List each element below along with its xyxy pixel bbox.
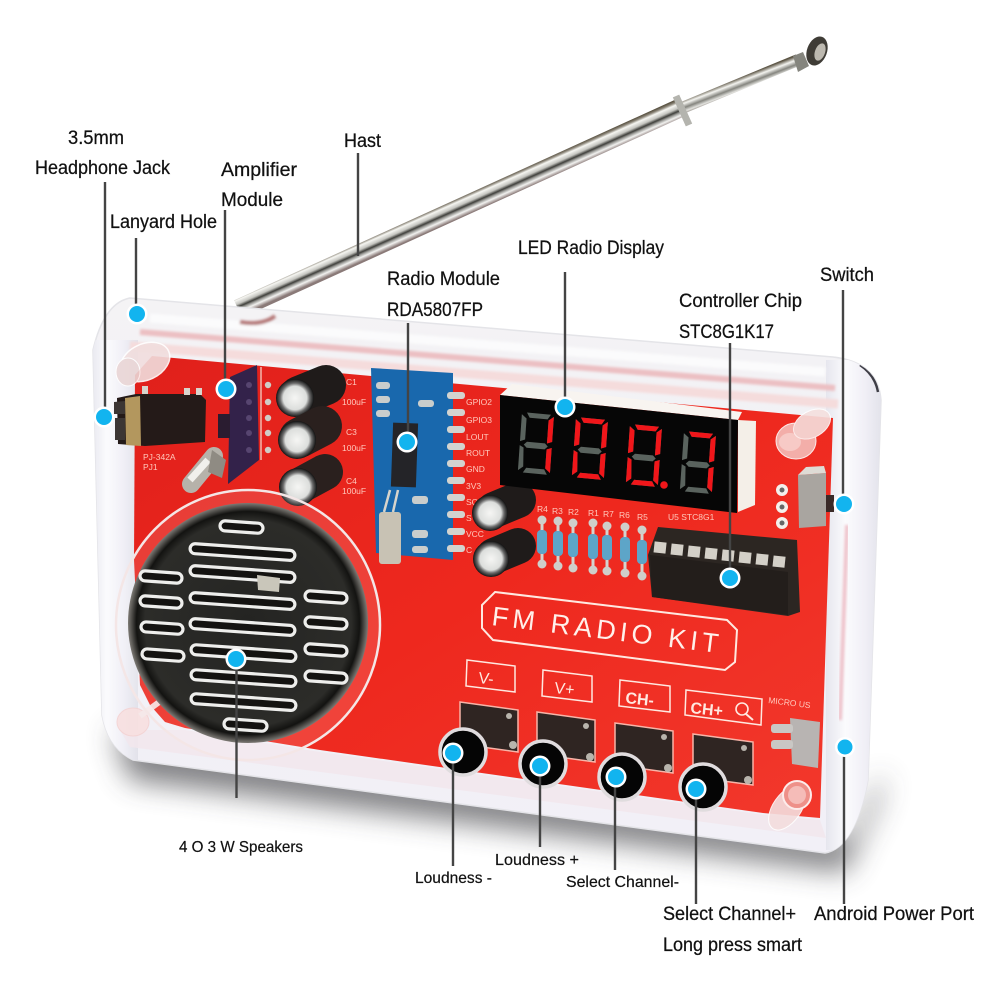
radio module board: GND <box>466 464 485 474</box>
radio device <box>90 298 882 853</box>
clear case <box>93 298 881 853</box>
FM RADIO KIT label: FM RADIO KIT <box>490 601 720 659</box>
capacitors: amplifier: C4 <box>346 476 357 486</box>
corner screw: top left <box>114 335 176 389</box>
callout: Controller Chip STC8G1K17: Controller Chip <box>679 291 802 312</box>
radio module board: SC <box>466 497 478 507</box>
top of display housing <box>500 384 742 420</box>
callout: Amplifier Module: Module <box>221 190 283 211</box>
radio module board: LOUT <box>466 432 489 442</box>
capacitors: amplifier: 100uF <box>342 443 366 453</box>
resistors <box>537 504 648 580</box>
power switch <box>776 466 834 529</box>
controller chip <box>648 512 800 616</box>
case shadow <box>112 730 885 872</box>
callout: Select Channel+ Long press smart: Long press smart <box>663 935 803 956</box>
callout: Loudness -: Loudness - <box>415 870 492 887</box>
speaker: solder blob <box>257 575 280 592</box>
button caps <box>440 729 726 810</box>
callout: Radio Module RDA5807FP: Radio Module <box>387 269 500 290</box>
callout: Lanyard Hole <box>110 212 217 324</box>
FM RADIO KIT label <box>482 592 737 670</box>
antenna: thick section <box>238 107 682 309</box>
radio module board <box>371 368 492 564</box>
headphone jack <box>114 386 206 472</box>
capacitors: amplifier: 100uF <box>342 397 366 407</box>
button label: V+ <box>542 670 592 702</box>
capacitors: amplifier: C1 <box>346 377 357 387</box>
micro USB port: MICRO US <box>768 695 811 710</box>
button label: CH+ search <box>685 690 762 725</box>
callout: Amplifier Module: Amplifier <box>221 160 298 181</box>
LED radio display <box>500 384 756 513</box>
callout: Controller Chip STC8G1K17: STC8G1K17 <box>679 322 774 343</box>
speaker: clear outer ring <box>116 490 380 760</box>
button label: CH- <box>619 680 670 712</box>
button label: V- <box>466 660 515 692</box>
callout: Android Power Port <box>814 737 975 925</box>
antenna <box>238 33 832 309</box>
resistors: R3 <box>552 506 563 516</box>
callout: Radio Module RDA5807FP <box>387 269 500 452</box>
resistors: R2 <box>568 507 579 517</box>
headphone jack: PJ-342A <box>143 452 176 462</box>
resistors: R4 <box>537 504 548 514</box>
white connector <box>738 420 756 512</box>
capacitors: amplifier: C3 <box>346 427 357 437</box>
red circuit board <box>134 356 833 818</box>
tact switch bases <box>460 702 753 785</box>
callout: Android Power Port: Android Power Port <box>814 904 975 925</box>
headphone jack: PJ1 <box>143 462 158 472</box>
radio module board: 3V3 <box>466 481 481 491</box>
callout: 4 O 3 W Speakers: 4 O 3 W Speakers <box>179 839 303 856</box>
case top reflections <box>130 316 838 404</box>
digit 3 <box>626 424 662 487</box>
corner screw: top right <box>776 403 836 459</box>
silver bolt <box>190 450 226 484</box>
speaker: grille <box>128 503 368 743</box>
button label: CH+ search: CH+ <box>690 700 724 720</box>
callout: Select Channel- <box>566 766 679 891</box>
digit 2 <box>572 417 608 480</box>
callout: 3.5mm Headphone Jack <box>35 128 170 428</box>
decimal point <box>660 481 668 489</box>
callout: Amplifier Module <box>216 160 298 400</box>
radio module board: GPIO2 <box>466 397 492 407</box>
callout: 4 O 3 W Speakers <box>179 648 303 856</box>
callout: Switch <box>820 265 874 514</box>
callout: Controller Chip STC8G1K17 <box>679 291 802 588</box>
bottom edge of case <box>120 730 826 838</box>
button label: V+: V+ <box>554 680 575 699</box>
resistors: R6 <box>619 510 630 520</box>
callout: Hast: Hast <box>344 131 382 152</box>
capacitors: amplifier <box>276 377 366 506</box>
callout: LED Radio Display <box>518 238 664 418</box>
radio module board: S <box>466 513 472 523</box>
button label: V-: V- <box>478 670 494 689</box>
top right corner shadow <box>860 365 878 392</box>
antenna: thin section <box>682 60 798 108</box>
radio module board: C <box>466 545 472 555</box>
controller chip: U5 STC8G1 <box>668 512 715 522</box>
right panel <box>826 360 882 850</box>
speaker: slots <box>140 521 347 732</box>
button label: CH-: CH- <box>625 690 655 710</box>
resistors: R7 <box>603 509 614 519</box>
callout: Select Channel+ Long press smart: Select Channel+ <box>663 904 796 925</box>
callout: 3.5mm Headphone Jack: 3.5mm <box>68 128 124 149</box>
callout: Hast <box>344 131 382 256</box>
micro USB port <box>768 695 820 768</box>
callout: Radio Module RDA5807FP: RDA5807FP <box>387 300 483 321</box>
callout: Select Channel-: Select Channel- <box>566 874 679 891</box>
resistors: R1 <box>588 508 599 518</box>
callout: Switch: Switch <box>820 265 874 286</box>
antenna: joint collar <box>676 96 689 125</box>
callout: 3.5mm Headphone Jack: Headphone Jack <box>35 158 170 179</box>
case panels <box>90 316 882 850</box>
corner screw: bottom right <box>761 779 813 837</box>
pink line on right panel <box>840 525 847 720</box>
digit 4 <box>680 431 716 494</box>
capacitors: amplifier: 100uF <box>342 486 366 496</box>
capacitors: display <box>472 495 518 577</box>
corner screw: bottom left <box>117 700 162 736</box>
antenna: tip <box>793 33 832 72</box>
callout: Loudness + <box>495 756 579 869</box>
speaker <box>116 490 380 760</box>
callout: LED Radio Display: LED Radio Display <box>518 238 664 259</box>
callout: Loudness - <box>415 742 492 887</box>
radio module board: VCC <box>466 529 484 539</box>
digit 1 <box>518 412 554 475</box>
radio module board: ROUT <box>466 448 490 458</box>
callout: Select Channel+ Long press smart <box>663 778 803 956</box>
callout: Loudness +: Loudness + <box>495 852 579 869</box>
radio module board: GPIO3 <box>466 415 492 425</box>
resistors: R5 <box>637 512 648 522</box>
left panel <box>90 340 138 760</box>
callout: Lanyard Hole: Lanyard Hole <box>110 212 217 233</box>
amplifier module <box>218 365 271 484</box>
